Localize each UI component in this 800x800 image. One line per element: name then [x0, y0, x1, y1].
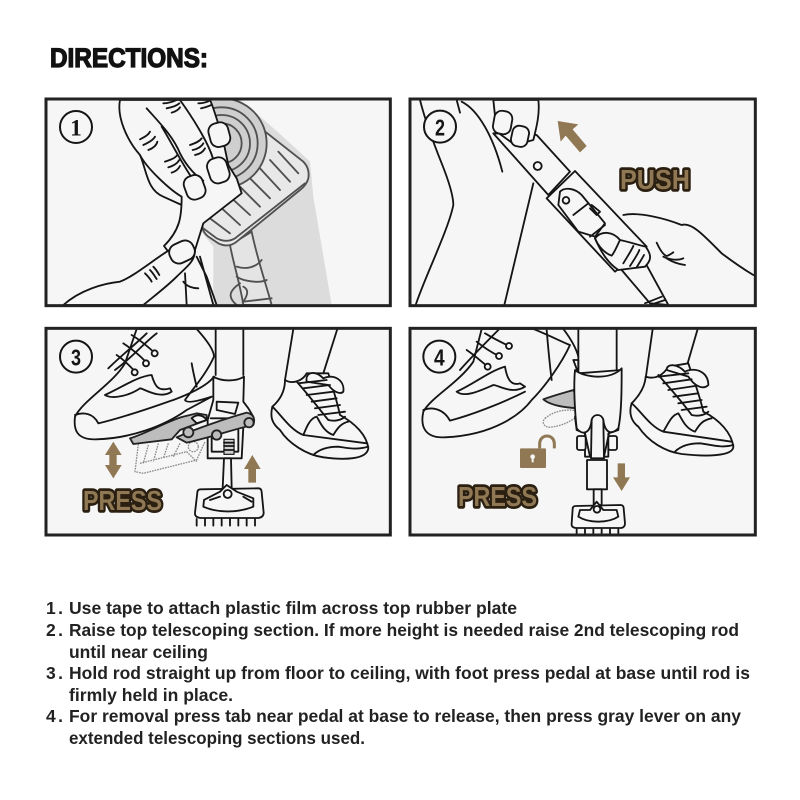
text block: instructions: Use tape to attach plastic film across top rubber plate	[69, 598, 517, 618]
panel: step 4	[410, 328, 755, 535]
arrow: rod down	[613, 463, 630, 491]
icon: step number 2: 2	[435, 114, 445, 140]
text block: instructions: extended telescoping sections used.	[69, 728, 365, 748]
text block: instructions: 1.	[46, 598, 63, 618]
text block: instructions	[46, 598, 750, 748]
icon: step number 2	[424, 111, 456, 143]
text block: instructions: 2.	[46, 620, 63, 640]
icon: step number 1: 1	[70, 115, 82, 141]
text block: instructions: Hold rod straight up from floor to ceiling, with foot press pedal at base until rod is	[69, 663, 750, 683]
label: press step 4: PRESS	[458, 481, 537, 512]
arrow: push up	[558, 121, 587, 152]
title: DIRECTIONS:	[50, 43, 208, 73]
label: push: PUSH	[620, 164, 690, 195]
panel: step 1	[46, 98, 390, 306]
icon: step number 3: 3	[71, 344, 81, 370]
panel: step 3	[46, 328, 390, 535]
text block: instructions: 3.	[46, 663, 63, 683]
text block: instructions: 4.	[46, 706, 63, 726]
icon: step number 3	[60, 341, 92, 373]
icon: step number 4: 4	[434, 344, 445, 370]
text block: instructions: For removal press tab near pedal at base to release, then press gray lever on any	[69, 706, 741, 726]
text block: instructions: Raise top telescoping section. If more height is needed raise 2nd telescoping rod	[69, 620, 739, 640]
label: press step 3: PRESS	[83, 485, 162, 516]
icon: open padlock	[520, 436, 554, 468]
icon: step number 4	[423, 341, 455, 373]
text block: instructions: firmly held in place.	[69, 685, 233, 705]
arrow: rod up	[244, 455, 261, 483]
panel: step 2	[410, 99, 755, 306]
arrow: press up and down	[105, 442, 122, 478]
text block: instructions: until near ceiling	[69, 642, 208, 662]
icon: step number 1	[60, 111, 92, 143]
